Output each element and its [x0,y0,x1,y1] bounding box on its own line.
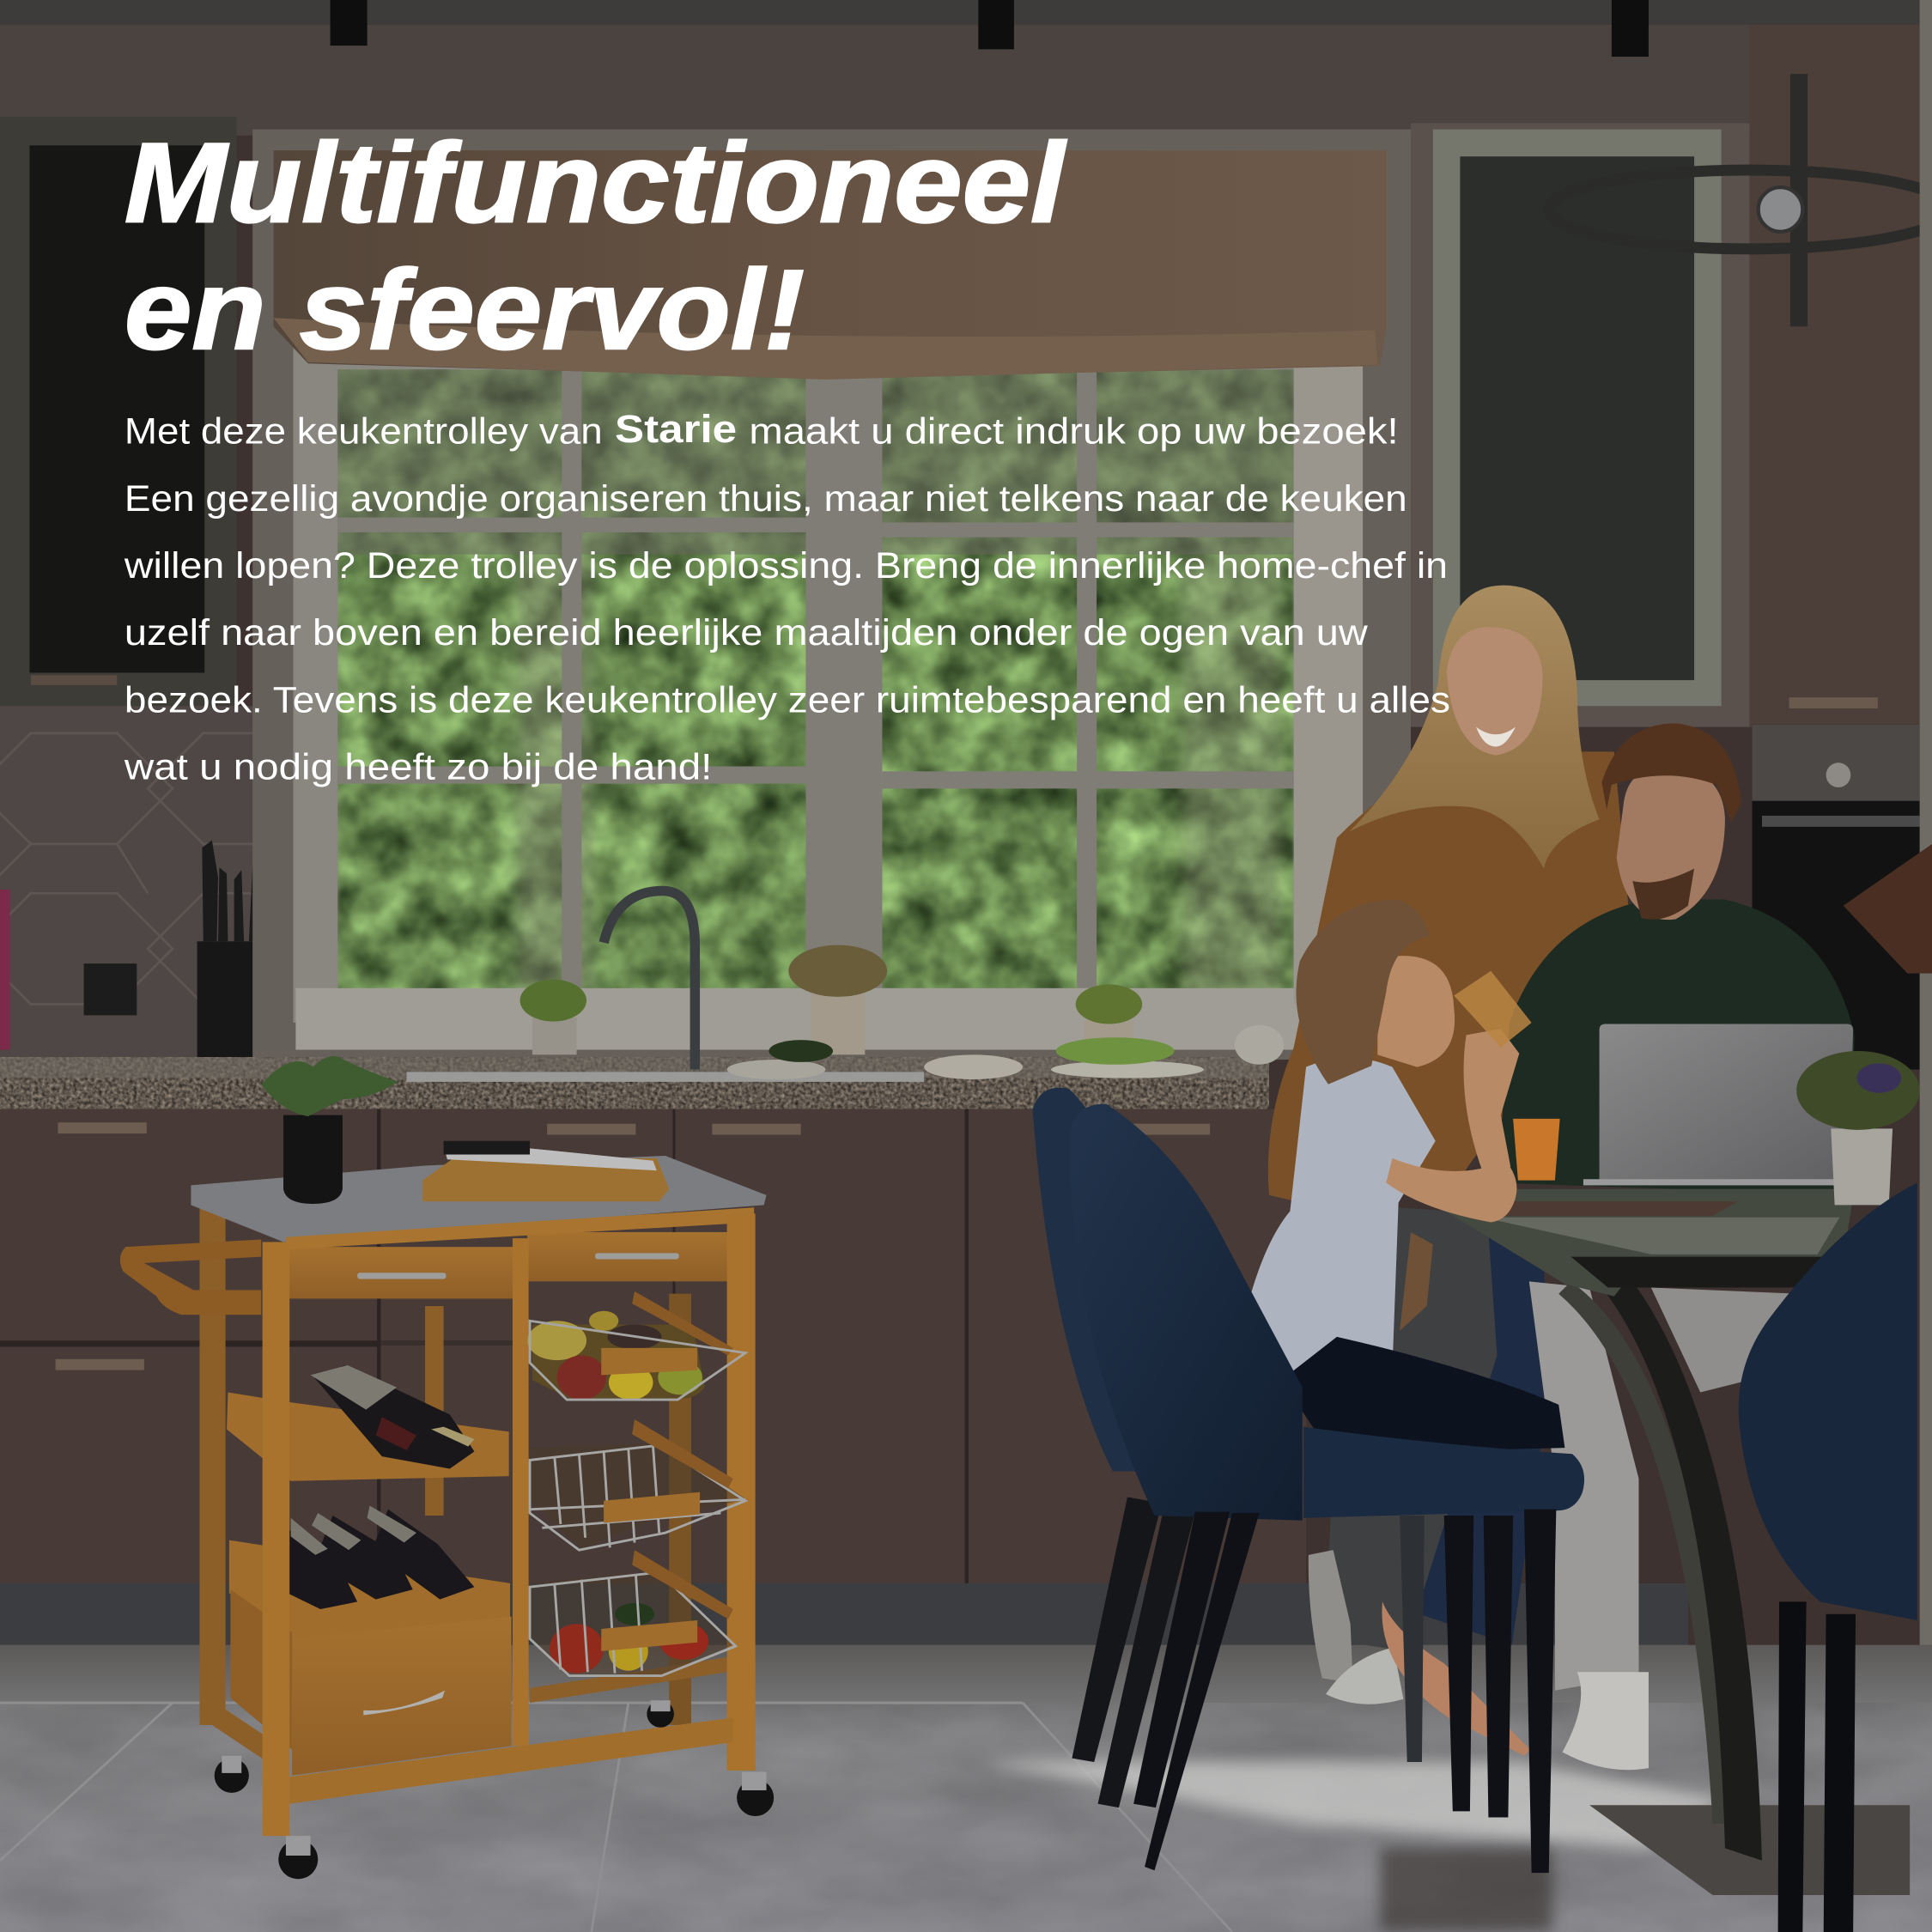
window foliage [337,369,1294,998]
title: Multifunctioneel [125,118,1066,246]
casters [215,1700,774,1879]
man's sweater [1497,900,1855,1195]
man's hair [1601,723,1741,822]
body paragraph: Starie [615,407,737,451]
plant on trolley [261,1056,398,1204]
chair seat [1303,1427,1584,1518]
foreground chair [1739,1183,1917,1932]
girl's hair [1296,900,1430,1084]
upper wall [0,25,1932,136]
body paragraph: willen lopen? Deze trolley is de oplossing. Breng de innerlijke home-chef in [124,545,1448,586]
woman's jeans [1419,1232,1549,1645]
front legs [263,1213,756,1836]
title: en sfeervol! [125,246,805,373]
body paragraph [124,407,1450,787]
woman's face [1447,627,1543,756]
bottom rail [289,1717,733,1804]
back chair [1032,1088,1195,1807]
bottom drawer [230,1589,512,1776]
cutting board and knife [422,1141,669,1201]
marble floor [0,1645,1932,1932]
ceiling ring lamp [1549,74,1932,326]
body paragraph: Een gezellig avondje organiseren thuis, maar niet telkens naar de keuken [125,478,1407,519]
chair back [1070,1104,1303,1521]
rear leg and rails [199,1207,727,1762]
girl's shirt [1241,1058,1436,1382]
right edge panel [1844,0,1932,1932]
man's beard [1632,869,1694,920]
bare feet [1382,1601,1530,1756]
body paragraph: bezoek. Tevens is deze keukentrolley zeer ruimtebesparend en heeft u alles [125,679,1450,720]
front chair [1070,1104,1584,1873]
woman's hair [1349,586,1600,869]
roman blind [274,150,1386,380]
woman's slipper [1326,1648,1403,1704]
flower pot on table [1796,1051,1920,1205]
fruit basket [527,1291,745,1400]
body paragraph: Met deze keukentrolley van [125,411,603,452]
girl's legs [1281,1337,1564,1454]
body paragraph: maakt u direct indruk op uw bezoek! [749,411,1399,452]
stainless top [191,1156,767,1242]
woman's sweater [1268,751,1629,1201]
table arched leg [1558,1281,1737,1824]
woman's shoes [1309,1550,1353,1683]
girl's head [1377,956,1455,1067]
upper wine shelf [227,1365,509,1481]
girl's arm [1386,1029,1519,1222]
chair legs [1133,1510,1556,1873]
title [125,118,1066,373]
girl figure [1241,900,1564,1756]
man's trousers [1529,1281,1638,1691]
towel handle [120,1240,261,1315]
ceiling spotlights [331,0,1649,57]
lower cabinets [0,1109,1306,1583]
window surround light [294,345,1363,1023]
body paragraph: wat u nodig heeft zo bij de hand! [124,747,712,787]
granite countertop [0,1057,1269,1109]
table top [1423,1189,1855,1297]
man figure [1497,723,1855,1770]
window muntins [295,363,1363,1050]
glass of juice on table [1513,1119,1560,1181]
juice glass [1454,971,1532,1048]
window frame [252,130,1411,1060]
empty wire basket [530,1419,747,1550]
body paragraph: uzelf naar boven en bereid heerlijke maaltijden onder de ogen van uw [125,612,1368,653]
dining table [1423,1189,1855,1861]
left wall cabinet [0,117,237,706]
man's slipper [1563,1672,1649,1770]
faucet [604,890,695,1070]
laptop [1583,1024,1853,1185]
lower wine shelf [229,1506,510,1643]
left drawer [286,1247,513,1298]
man's head [1617,766,1725,920]
tiled backsplash [0,706,277,1063]
right wall cabinet [1411,123,1750,727]
woman's smile [1476,727,1516,747]
woman's grey trousers [1325,1207,1497,1651]
window sill plants and plates [520,945,1284,1079]
right wall [1750,25,1932,727]
plinth [0,1583,1688,1645]
knife block [197,841,265,1079]
woman figure [1268,586,1629,1704]
ceiling band [0,0,1932,25]
right drawer [527,1232,747,1281]
kitchen trolley [120,1056,774,1879]
top rail [286,1207,754,1249]
oven [1752,697,1920,1070]
vegetable basket [530,1550,736,1676]
